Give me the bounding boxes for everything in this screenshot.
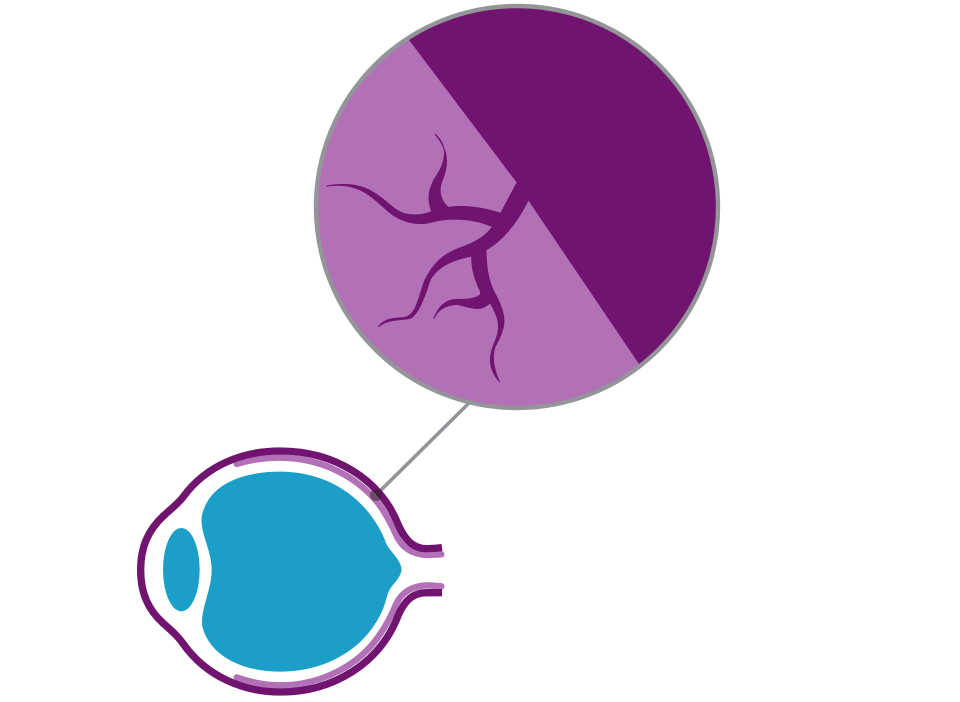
outer sclera outline <box>141 451 442 692</box>
connector line from eye to magnified circle <box>376 403 469 495</box>
upper light retina layer <box>237 458 441 555</box>
lens <box>163 528 200 611</box>
light retina background <box>316 6 718 408</box>
eye cross-section <box>141 451 442 692</box>
magnified retina circle <box>316 0 760 408</box>
connector end dot <box>370 489 382 501</box>
branching blood vessels <box>327 134 530 382</box>
lower light retina layer <box>237 585 441 685</box>
dark retina area <box>409 8 716 364</box>
circle outline <box>316 6 718 408</box>
vitreous body <box>202 472 402 672</box>
infographic: eye with magnified retina <box>137 4 720 696</box>
